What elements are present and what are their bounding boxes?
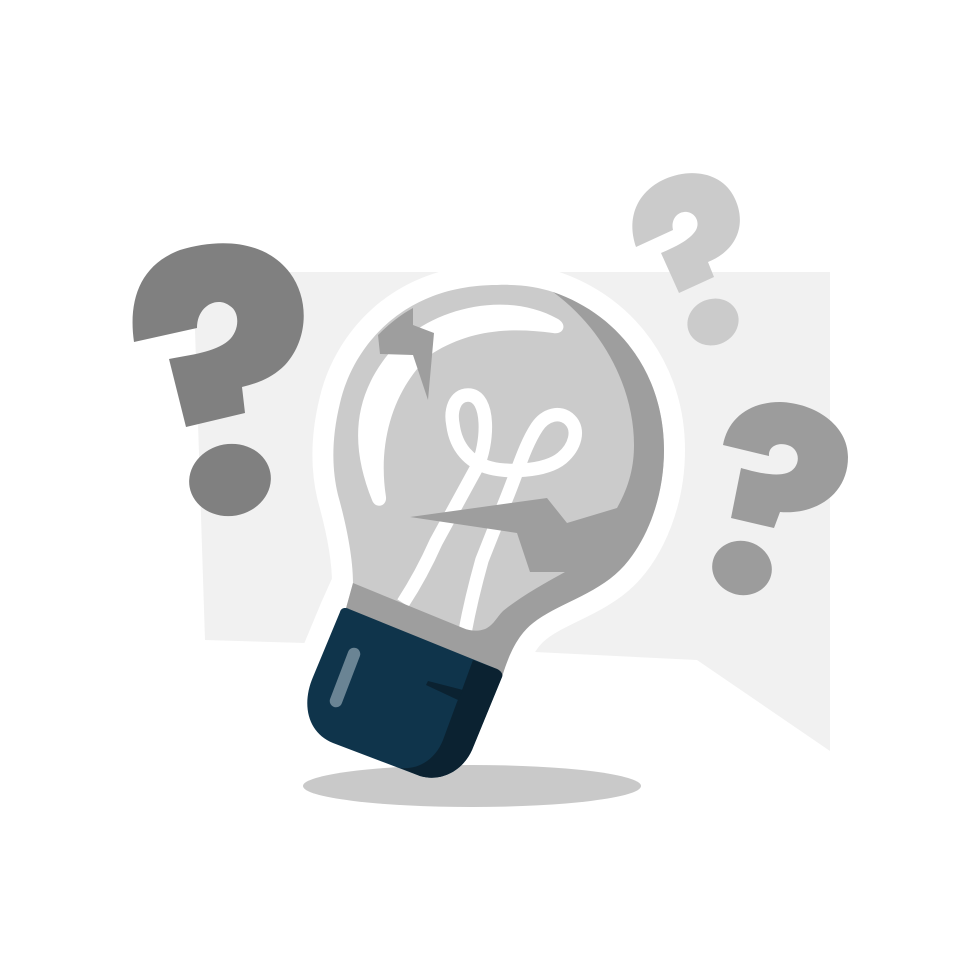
glass fill: [333, 285, 664, 677]
bulb white halo: [307, 285, 664, 778]
highlight crescent: [358, 305, 563, 506]
base highlight: [336, 654, 354, 701]
base shading: [400, 660, 502, 778]
glass shade, side crack and neck band: [345, 292, 664, 677]
question mark: large left: [133, 243, 304, 523]
question mark: top right light: [632, 173, 746, 353]
speech bubble background: [195, 272, 830, 751]
crack top: [378, 308, 434, 400]
question mark: right medium: [706, 402, 848, 601]
base notch: [426, 681, 463, 700]
bulb screw base: [307, 608, 502, 778]
ground shadow: [303, 765, 641, 807]
light bulb: [307, 285, 664, 778]
filament: [403, 395, 575, 632]
